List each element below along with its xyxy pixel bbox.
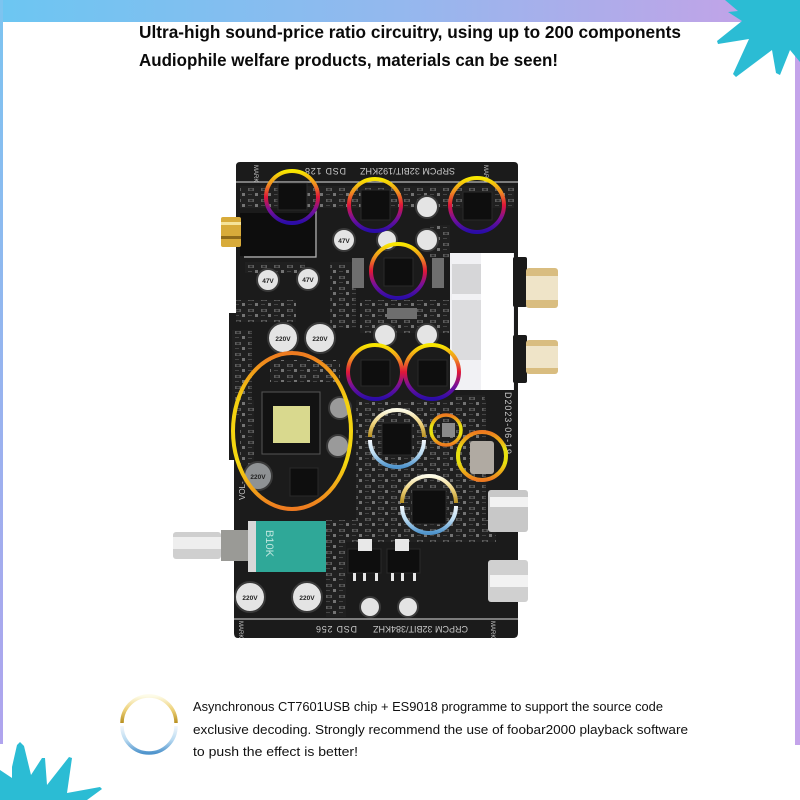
board date text: D2023-06-19 <box>503 392 513 454</box>
op-amp chips <box>278 183 492 573</box>
component texture <box>232 186 514 617</box>
regulator tabs <box>353 539 416 581</box>
description text <box>193 699 688 759</box>
potentiometer with knob <box>173 521 326 572</box>
decorative burst: bottom left <box>0 742 102 800</box>
silkscreen bottom labels: CRPCM 32BIT/384KHZ <box>373 624 468 634</box>
USB-C port top <box>488 490 528 532</box>
capacitors <box>235 196 438 617</box>
right edge strip <box>795 0 800 745</box>
heading: Ultra-high sound-price ratio circuitry, using up to 200 components <box>139 22 681 42</box>
transformer <box>262 392 320 454</box>
silkscreen top labels: DSD 128 <box>305 166 346 176</box>
capacitor ratings: 220V <box>275 336 291 343</box>
capacitor ratings: 220V <box>242 595 258 602</box>
legend ring icon <box>122 696 176 753</box>
USB-C port bottom <box>488 560 528 602</box>
silkscreen lines <box>234 182 518 619</box>
silkscreen bottom labels: DSD 256 <box>316 624 357 634</box>
capacitor ratings: 47V <box>262 278 274 285</box>
top gradient band <box>0 0 800 22</box>
highlight ring: USB chip <box>370 410 424 467</box>
silkscreen top labels: MARK <box>252 165 258 182</box>
RCA jack bottom <box>526 340 558 374</box>
potentiometer with knob: B10K <box>263 530 275 558</box>
volume label: VOL- <box>238 481 247 500</box>
white RCA connector housing <box>450 253 527 390</box>
highlight ellipse: power section <box>233 353 351 509</box>
heading: Audiophile welfare products, materials can be seen! <box>139 50 558 70</box>
highlight ring: decoder chip <box>402 476 456 533</box>
description text: exclusive decoding. Strongly recommend the use of foobar2000 playback software <box>193 722 688 737</box>
silkscreen bottom labels: MARK <box>237 621 243 638</box>
decorative burst: top right <box>717 0 800 77</box>
highlight ring: large inductor <box>458 432 506 480</box>
highlight ring: small inductor <box>431 415 461 445</box>
description text: to push the effect is better! <box>193 744 358 759</box>
capacitor ratings <box>242 238 350 602</box>
capacitor ratings: 220V <box>312 336 328 343</box>
capacitor ratings: 220V <box>299 595 315 602</box>
heading <box>139 22 681 70</box>
silkscreen top labels: SRPCM 32BIT/192KHZ <box>359 166 455 176</box>
resistor blocks <box>352 258 444 319</box>
RCA jack top <box>526 268 558 308</box>
description text: Asynchronous CT7601USB chip + ES9018 programme to support the source code <box>193 699 663 714</box>
silkscreen bottom labels: MARK <box>489 621 495 638</box>
capacitor ratings: 47V <box>338 238 350 245</box>
capacitor ratings: 47V <box>302 277 314 284</box>
silkscreen top labels <box>252 165 488 182</box>
left edge strip <box>0 0 3 744</box>
chokes <box>442 423 455 437</box>
capacitor ratings: 220V <box>250 474 266 481</box>
highlight rings: op-amps <box>266 171 504 399</box>
circuit board photo <box>173 162 558 638</box>
headphone jack with gold plug <box>221 213 315 256</box>
silkscreen top labels: MARK <box>482 165 488 182</box>
board body <box>229 162 518 638</box>
silkscreen bottom labels <box>237 621 495 638</box>
